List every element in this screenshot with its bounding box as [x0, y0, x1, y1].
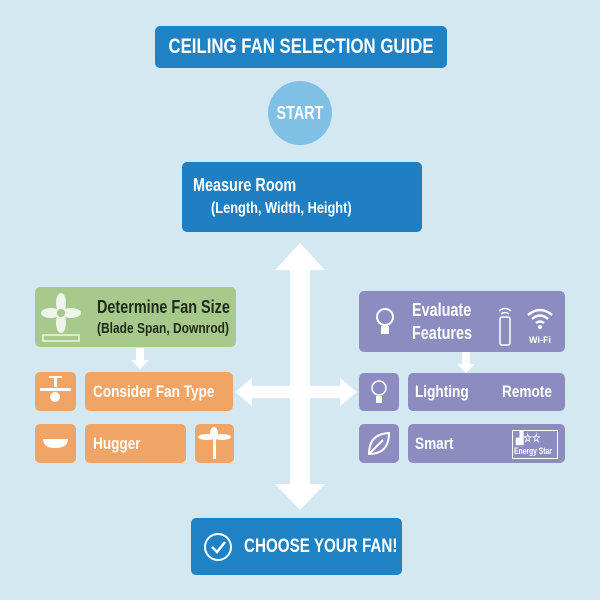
box: consider fan type — [85, 372, 233, 411]
box: lighting remote — [408, 373, 565, 411]
icon: energy star — [512, 430, 558, 459]
box: consider fan type: Consider Fan Type — [93, 382, 214, 401]
icon box: palm — [195, 424, 234, 463]
measure room box: Measure Room — [193, 175, 296, 195]
arrow: horizontal double — [235, 378, 357, 406]
box: smart energy star: Smart — [415, 434, 454, 453]
title — [155, 26, 447, 68]
icon box: leaf — [359, 424, 399, 463]
panel: evaluate features: Features — [412, 323, 472, 343]
panel: evaluate features — [359, 291, 565, 352]
icon: bulb — [376, 308, 394, 334]
icon: energy star: ▟☆☆ — [516, 431, 541, 445]
measure room box: (Length, Width, Height) — [211, 200, 352, 217]
box: lighting remote: Lighting — [415, 382, 469, 401]
panel: determine fan size: (Blade Span, Downrod) — [97, 320, 229, 337]
icon box: lighting — [359, 373, 399, 411]
arrow: vertical double — [275, 243, 325, 510]
icon box: fan type — [35, 372, 76, 411]
title: CEILING FAN SELECTION GUIDE — [168, 35, 434, 58]
icon: check circle — [204, 533, 232, 561]
box: smart energy star — [408, 424, 565, 463]
box: hugger: Hugger — [93, 434, 141, 453]
icon: wifi — [527, 308, 553, 345]
icon: fan — [41, 293, 81, 342]
box: hugger — [85, 424, 186, 463]
arrow: down small right — [457, 352, 475, 373]
arrow: down small left — [131, 348, 149, 369]
icon: energy star: Energy Star — [514, 446, 552, 456]
icon box: hugger — [35, 424, 76, 463]
icon: remote — [498, 308, 512, 346]
box: lighting remote: Remote — [502, 382, 552, 401]
final box: choose your fan: CHOOSE YOUR FAN! — [244, 536, 397, 557]
panel: evaluate features: Evaluate — [412, 300, 471, 320]
icon: wifi: Wi-Fi — [529, 335, 551, 345]
final box: choose your fan — [191, 518, 402, 575]
panel: determine fan size: Determine Fan Size — [97, 297, 230, 317]
panel: determine fan size — [35, 287, 236, 347]
start circle — [268, 81, 332, 145]
start circle: START — [277, 103, 323, 123]
measure room box — [182, 162, 422, 232]
